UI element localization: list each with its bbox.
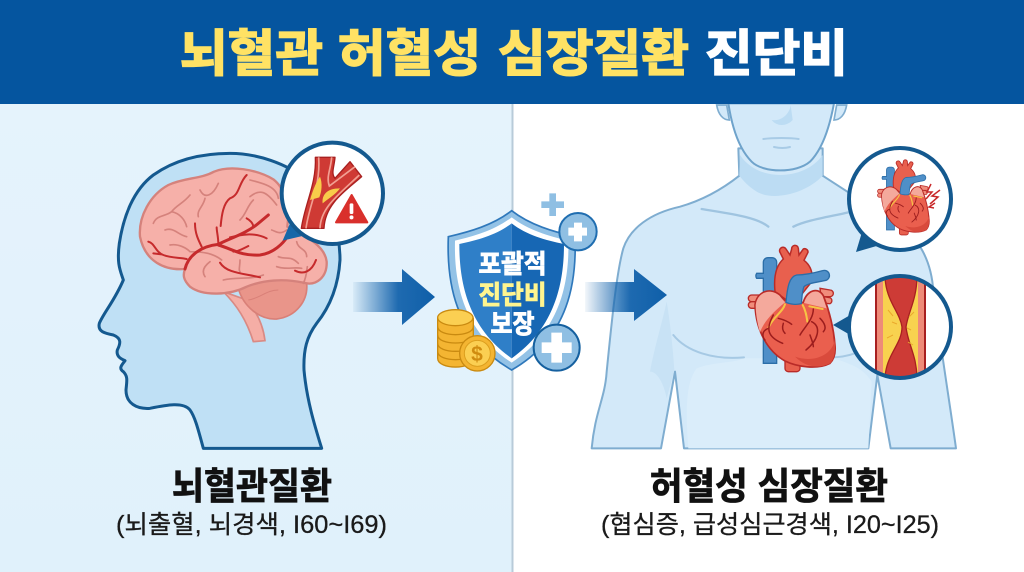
collarbones — [702, 209, 848, 227]
ears — [717, 105, 847, 120]
badge: comprehensive coverage shield: 보장 — [490, 309, 535, 339]
coin stack — [438, 318, 473, 367]
header band with title — [0, 0, 1024, 104]
brain stem — [223, 292, 265, 342]
right torso illustration — [592, 103, 956, 448]
caption: cerebrovascular disease: 뇌혈관질환 — [172, 466, 332, 507]
badge: comprehensive coverage shield — [438, 193, 597, 371]
callout: heart attack — [849, 148, 951, 252]
arm shading — [650, 302, 674, 398]
chest lines — [673, 335, 855, 358]
shield body — [448, 211, 575, 370]
callout: narrowed coronary artery — [833, 275, 951, 380]
callout: blocked cerebral artery — [282, 143, 383, 244]
face — [728, 103, 834, 170]
head outline — [99, 153, 340, 448]
plus badge large — [534, 325, 580, 371]
panel: left background — [0, 104, 512, 572]
cerebrum — [140, 168, 327, 294]
head silhouette with brain — [99, 143, 383, 448]
badge: comprehensive coverage shield: 포괄적 — [478, 249, 546, 279]
heart — [748, 245, 835, 372]
brain folds — [153, 180, 307, 283]
plus badge small — [559, 213, 597, 250]
header band with title: 진단비 — [705, 26, 848, 82]
caption: ischemic heart disease: 허혈성 심장질환 — [650, 466, 888, 507]
badge: comprehensive coverage shield: $ — [471, 343, 483, 366]
caption: ischemic heart disease: (협심증, 급성심근경색, I20~I25) — [601, 511, 939, 539]
panel: right background — [513, 104, 1024, 572]
arrow: left to shield — [353, 269, 435, 325]
dollar coin — [460, 336, 495, 371]
light plus — [541, 193, 564, 216]
header band with title: 허혈성 — [338, 26, 481, 82]
arrow: shield to right — [585, 269, 667, 321]
header band with title: 심장질환 — [498, 26, 689, 82]
header band with title: 뇌혈관 — [180, 26, 323, 82]
cerebellum — [238, 279, 307, 319]
neck shadow — [739, 155, 823, 196]
caption: ischemic heart disease — [601, 466, 939, 539]
brain arteries — [185, 215, 287, 269]
caption: cerebrovascular disease — [116, 466, 387, 539]
badge: comprehensive coverage shield: 진단비 — [478, 280, 546, 310]
torso body — [592, 148, 956, 448]
caption: cerebrovascular disease: (뇌출혈, 뇌경색, I60~I69) — [116, 511, 387, 539]
